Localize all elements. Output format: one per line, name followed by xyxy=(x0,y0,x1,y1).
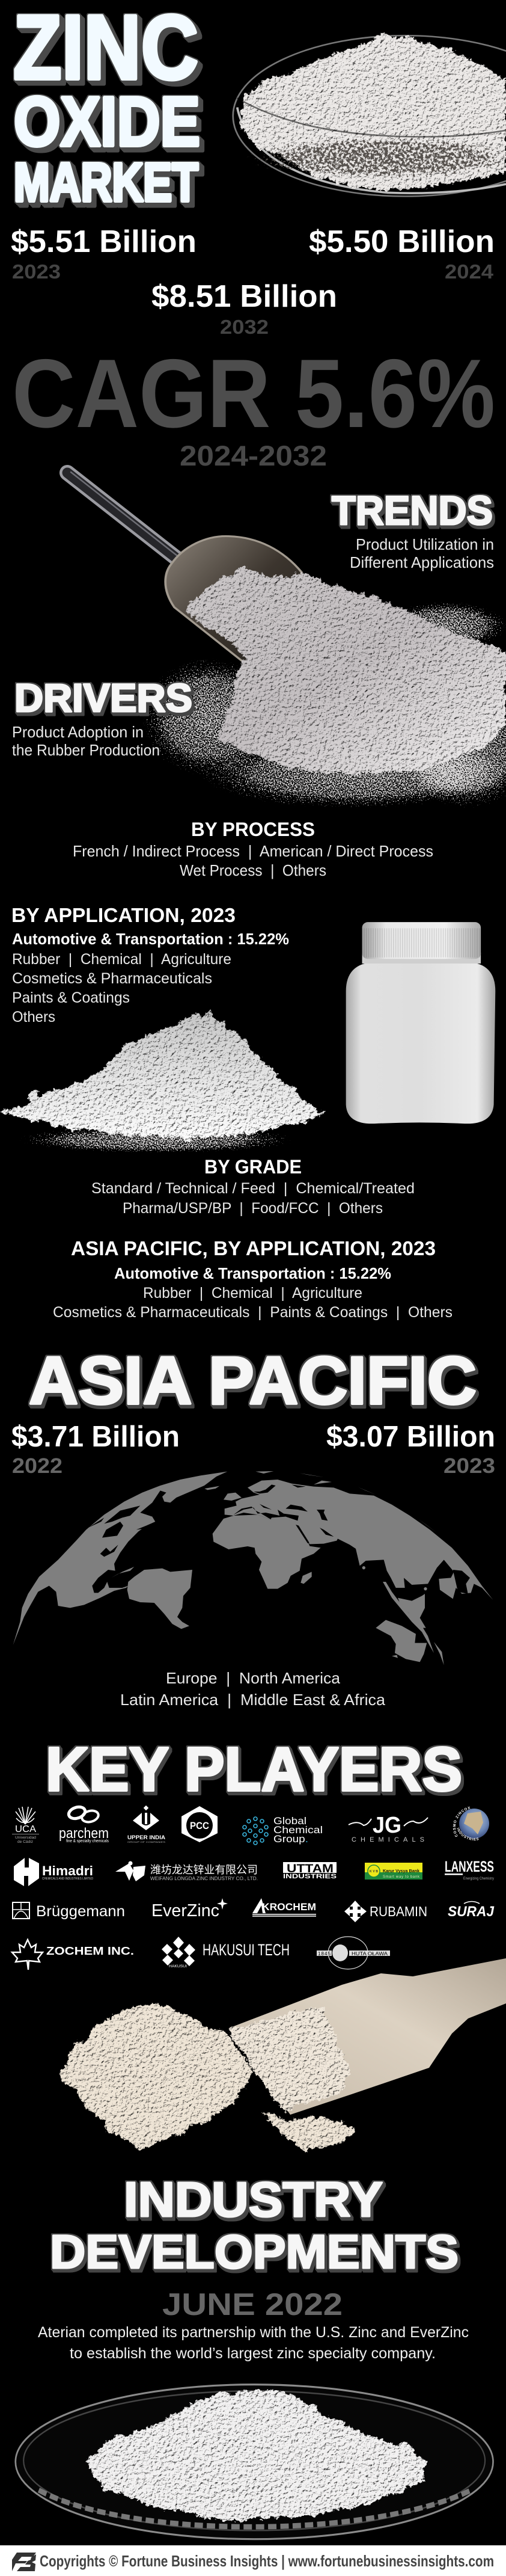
segment: by process: French / Indirect Process | American / Direct Process xyxy=(73,842,433,860)
logo: Weifang Longda Zinc xyxy=(115,1861,258,1881)
stat: asia pacific 2022: 2022 xyxy=(12,1454,62,1478)
heading: trends: Product Utilization in xyxy=(356,535,494,553)
segment: by grade: Pharma/USP/BP | Food/FCC | Others xyxy=(123,1200,383,1217)
segment: by application: BY APPLICATION, 2023 xyxy=(11,904,236,926)
CAGR: 2024-2032 xyxy=(180,440,327,472)
segment: by process: BY PROCESS xyxy=(191,819,315,840)
logo: PCC xyxy=(181,1806,218,1842)
title: MARKET xyxy=(14,153,198,213)
stat: 2032 market size: $8.51 Billion xyxy=(151,279,337,314)
stat: 2032 market size: 2032 xyxy=(220,316,269,338)
development date and text: Aterian completed its partnership with the U.S. Zinc and EverZinc xyxy=(38,2324,469,2341)
logo: Weifang Longda Zinc: WEIFANG LONGDA ZINC INDUSTRY CO., LTD. xyxy=(150,1876,258,1881)
logo: Cosmo Zincox Industries xyxy=(453,1806,489,1840)
logo: UCA: Universidad xyxy=(15,1836,36,1840)
heading: industry developments xyxy=(50,2172,459,2278)
logo: JG Chemicals: CHEMICALS xyxy=(352,1836,424,1843)
logo: Zochem: ZOCHEM INC. xyxy=(46,1945,134,1957)
logo: Cosmo Zincox Industries: COSMO ZINCOX xyxy=(453,1806,471,1837)
segment: by process xyxy=(73,819,433,879)
title xyxy=(13,0,200,213)
logo: Global Chemical Group: Chemical xyxy=(273,1824,323,1836)
development date and text: JUNE 2022 xyxy=(162,2287,343,2322)
stat: 2023 market size: 2023 xyxy=(12,260,61,283)
segment: asia pacific by application: Cosmetics & Pharmaceuticals | Paints & Coatings | Others xyxy=(53,1304,453,1321)
heading: drivers: DRIVERS xyxy=(14,675,192,720)
heading: trends: TRENDS xyxy=(332,488,493,533)
segment: by grade: BY GRADE xyxy=(204,1156,302,1178)
logo: Global Chemical Group: Global xyxy=(273,1815,306,1827)
stat: 2023 market size xyxy=(11,224,197,283)
development date and text: to establish the world’s largest zinc specialty company. xyxy=(70,2345,436,2362)
logo: Zochem xyxy=(12,1940,134,1970)
logo: PCC: PCC xyxy=(190,1820,209,1831)
image: spatula with beige powder xyxy=(58,1958,506,2151)
logo: Rubamin: RUBAMIN xyxy=(370,1904,427,1919)
logo: Bruggemann: Brüggemann xyxy=(36,1903,125,1920)
image: glass plate with powder xyxy=(16,2385,493,2539)
heading: industry developments: INDUSTRY xyxy=(124,2172,383,2227)
stat: 2032 market size xyxy=(151,279,337,338)
segment: by application: Automotive & Transportation : 15.22% xyxy=(12,930,289,948)
heading: drivers: the Rubber Production xyxy=(12,741,160,759)
stat: asia pacific 2023 xyxy=(326,1421,495,1478)
world map globe xyxy=(13,1471,493,1665)
segment: by application xyxy=(11,904,289,1025)
heading: drivers xyxy=(12,675,192,759)
logo: Uttam Industries: INDUSTRIES xyxy=(283,1873,337,1880)
image: metal scoop with powder xyxy=(67,472,506,808)
logo: Hakusui Tech: HAKUSUI xyxy=(169,1965,187,1969)
image: powder heap xyxy=(0,1012,325,1153)
logo: parchem: fine & specialty chemicals xyxy=(66,1839,109,1843)
segment: by grade: Standard / Technical / Feed | Chemical/Treated xyxy=(91,1180,415,1197)
development date and text xyxy=(38,2287,469,2362)
heading: key players: KEY PLAYERS xyxy=(46,1735,462,1804)
logo: UCA xyxy=(12,1807,39,1844)
image: white plastic jar xyxy=(346,922,495,1124)
list: other regions xyxy=(120,1669,386,1709)
logo: Upper India: UPPER INDIA xyxy=(127,1834,165,1841)
logo: JG Chemicals: JG xyxy=(373,1813,401,1838)
image: powder in glass dish xyxy=(233,35,506,196)
stat: 2024 market size xyxy=(309,224,495,283)
logo: Hakusui Tech: HAKUSUI TECH xyxy=(203,1941,290,1959)
logo: Karur Vysya Bank: Smart way to bank xyxy=(383,1875,420,1879)
stat: asia pacific 2023: $3.07 Billion xyxy=(326,1421,495,1453)
logo: parchem: parchem xyxy=(59,1825,109,1842)
heading: trends: Different Applications xyxy=(350,553,494,571)
logo: Uttam Industries: UTTAM xyxy=(287,1863,334,1875)
segment: by grade xyxy=(91,1156,415,1217)
segment: by application: Others xyxy=(12,1009,55,1025)
logo: EverZinc: EverZinc xyxy=(151,1901,219,1920)
logo: Lanxess: Energizing Chemistry xyxy=(463,1877,494,1881)
stat: 2023 market size: $5.51 Billion xyxy=(11,224,197,259)
stat: 2024 market size: 2024 xyxy=(445,260,494,283)
footer xyxy=(0,2545,506,2576)
logo: Himadri: CHEMICALS AND INDUSTRIES LIMITED xyxy=(42,1877,93,1881)
icon: Fortune Business Insights logo xyxy=(12,2553,36,2571)
logo: Suraj: SURAJ xyxy=(448,1904,495,1920)
logo: parchem xyxy=(59,1805,109,1843)
logo: Weifang Longda Zinc: 潍坊龙达锌业有限公司 xyxy=(150,1864,258,1876)
logo: Hakusui Tech xyxy=(162,1937,290,1969)
logo: Karur Vysya Bank: Karur Vysya Bank xyxy=(383,1868,420,1874)
segment: by application: Paints & Coatings xyxy=(12,989,130,1006)
logo: JG Chemicals xyxy=(349,1813,428,1843)
logo: Akrochem: KROCHEM xyxy=(262,1901,316,1913)
stat: 2024 market size: $5.50 Billion xyxy=(309,224,495,259)
logo: Huta Olawa: 1845 xyxy=(318,1951,331,1957)
segment: asia pacific by application: Automotive & Transportation : 15.22% xyxy=(114,1264,391,1282)
logo: Upper India xyxy=(127,1806,165,1843)
stat: asia pacific 2022 xyxy=(11,1421,180,1478)
logo: Uttam Industries xyxy=(283,1862,337,1880)
logo: Himadri xyxy=(14,1858,93,1886)
logo: Rubamin xyxy=(344,1901,427,1922)
logo: Lanxess xyxy=(445,1858,494,1881)
logo: Upper India: GROUP OF COMPANIES xyxy=(127,1840,165,1843)
segment: asia pacific by application: Rubber | Chemical | Agriculture xyxy=(143,1285,362,1302)
segment: by application: Rubber | Chemical | Agriculture xyxy=(12,951,231,968)
logo: Karur Vysya Bank: KVB xyxy=(370,1870,378,1874)
title: OXIDE xyxy=(14,82,200,161)
list: other regions: Latin America | Middle East & Africa xyxy=(120,1691,386,1709)
segment: by process: Wet Process | Others xyxy=(180,861,326,879)
logo: Global Chemical Group xyxy=(243,1815,323,1845)
logo: Himadri: Himadri xyxy=(42,1863,93,1878)
logo: Global Chemical Group: Group . xyxy=(273,1833,308,1845)
logos: key players xyxy=(10,1806,495,1970)
heading: industry developments: DEVELOPMENTS xyxy=(50,2225,459,2278)
segment: by application: Cosmetics & Pharmaceuticals xyxy=(12,970,212,987)
logo: UCA: UCA xyxy=(15,1824,36,1834)
stat: asia pacific 2022: $3.71 Billion xyxy=(11,1421,180,1453)
heading: asia pacific: ASIA PACIFIC xyxy=(29,1343,477,1418)
heading: drivers: Product Adoption in xyxy=(12,723,144,741)
list: other regions: Europe | North America xyxy=(166,1669,341,1687)
segment: asia pacific by application: ASIA PACIFIC, BY APPLICATION, 2023 xyxy=(71,1237,436,1259)
logo: Cosmo Zincox Industries: INDUSTRIES xyxy=(457,1827,478,1840)
logo: Akrochem xyxy=(252,1898,316,1917)
logo: UCA: de Cádiz xyxy=(17,1840,33,1844)
logo: Karur Vysya Bank xyxy=(365,1863,422,1880)
segment: asia pacific by application xyxy=(53,1237,453,1321)
logo: Huta Olawa: HUTA OŁAWA xyxy=(352,1951,388,1957)
heading: trends xyxy=(332,488,494,571)
stat: asia pacific 2023: 2023 xyxy=(444,1454,495,1478)
logo: Huta Olawa xyxy=(317,1937,390,1969)
